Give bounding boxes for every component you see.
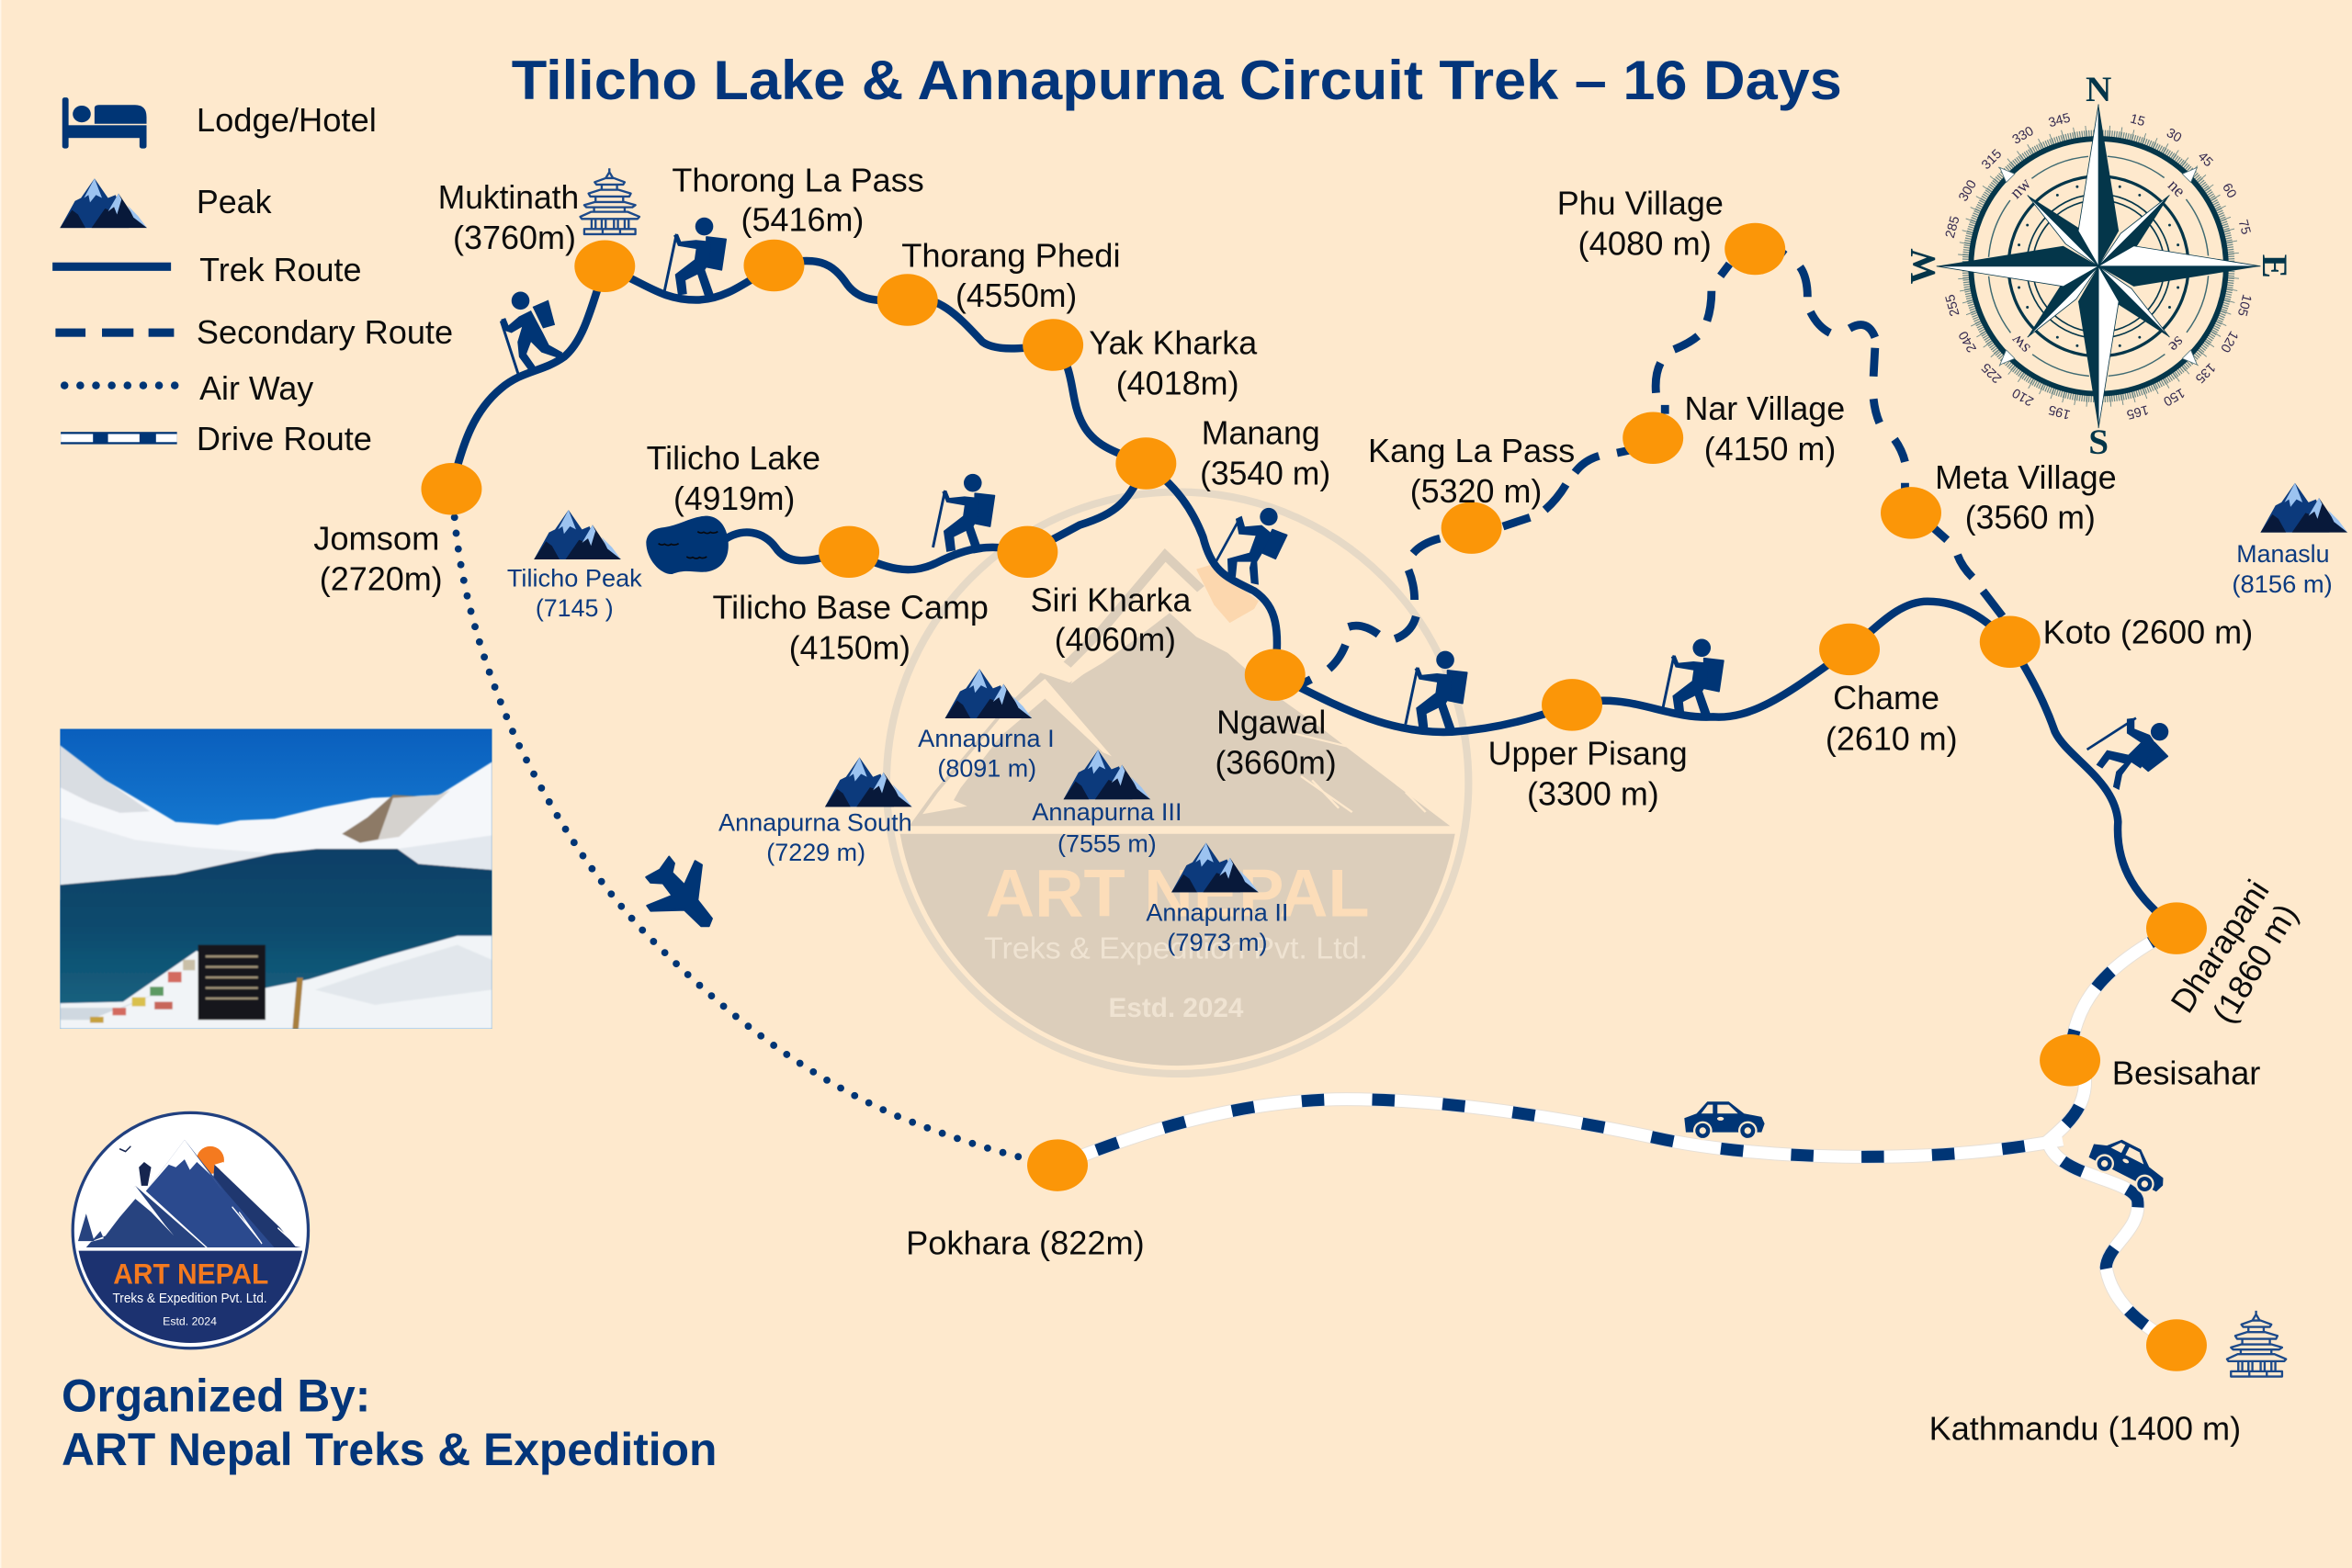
peak label: Tilicho Peak: (7145 )	[536, 594, 614, 622]
legend label: peak: Peak	[197, 183, 272, 220]
ART Nepal logo	[73, 1112, 309, 1348]
legend label: secondary route: Secondary Route	[197, 313, 453, 351]
drive route sample	[61, 432, 177, 445]
stop label: Thorong La Pass: (5416m)	[741, 200, 864, 238]
icon: peak Annapurna I	[945, 669, 1032, 718]
stop label: Siri Kharka: (4060m)	[1055, 621, 1176, 659]
stop label: Kathmandu: Kathmandu (1400 m)	[1929, 1409, 2241, 1447]
compass rose: N	[2086, 70, 2111, 109]
stop label: Tilicho Base Camp: (4150m)	[789, 629, 910, 667]
peak label: Annapurna I: (8091 m)	[937, 755, 1036, 783]
stop label: Kang La Pass: Kang La Pass	[1368, 432, 1575, 469]
compass rose	[1903, 70, 2294, 462]
stop label: Tilicho Lake: Tilicho Lake	[647, 439, 820, 477]
peak label: Annapurna III	[1032, 798, 1182, 857]
stop label: Tilicho Lake: (4919m)	[673, 479, 795, 517]
peak label: Annapurna III: (7555 m)	[1057, 829, 1157, 857]
peak label: Annapurna II: (7973 m)	[1167, 929, 1268, 956]
stop label: Jomsom	[313, 519, 443, 597]
compass rose: 210	[2010, 385, 2036, 409]
stop label: Ngawal: Ngawal	[1216, 703, 1326, 740]
stop label: Jomsom: (2720m)	[320, 559, 443, 597]
stop label: Manang: Manang	[1202, 413, 1320, 451]
stop label: Phu Village	[1557, 184, 1724, 263]
stop label: Nar Village	[1684, 389, 1845, 468]
stop label: Pokhara: Pokhara (822m)	[906, 1224, 1145, 1262]
compass rose: 75	[2235, 219, 2253, 236]
stop label: Muktinath: (3760m)	[453, 219, 576, 256]
peak label: Annapurna I	[918, 725, 1055, 783]
stop label: Phu Village: (4080 m)	[1578, 225, 1712, 263]
legend label: drive route: Drive Route	[197, 420, 372, 457]
icon: peak Annapurna III	[1064, 750, 1150, 799]
stop label: Koto: Koto (2600 m)	[2043, 613, 2253, 650]
stop label: Ngawal	[1215, 703, 1337, 781]
stop label: Thorong La Pass: Thorong La Pass	[672, 161, 924, 198]
organizer credit: ART Nepal Treks & Expedition	[62, 1424, 717, 1475]
stop label: Dharapani: (1860 m)	[2204, 897, 2305, 1030]
compass rose: W	[1903, 248, 1942, 284]
title: Tilicho Lake & Annapurna Circuit Trek – 16 Days	[512, 49, 1842, 111]
stop label: Kang La Pass: (5320 m)	[1410, 472, 1542, 510]
peak label: Manaslu: (8156 m)	[2232, 570, 2333, 598]
compass rose: 240	[1956, 328, 1980, 355]
logo brand name: ART NEPAL	[113, 1258, 268, 1291]
watermark brand name: ART NEPAL	[986, 855, 1370, 931]
compass rose: sw	[2007, 330, 2034, 357]
stop label: Manang	[1200, 413, 1330, 491]
stop label: Upper Pisang: (3300 m)	[1527, 775, 1659, 813]
peak label: Annapurna South: Annapurna South	[718, 808, 912, 836]
peak label: Manaslu: Manaslu	[2236, 540, 2330, 568]
stop label: Chame	[1826, 679, 1958, 757]
stop label: Thorang Phedi: Thorang Phedi	[901, 237, 1121, 275]
icon: temple at Muktinath	[581, 168, 639, 234]
icon: climber after Koto	[2087, 718, 2168, 790]
icon: peak Tilicho	[534, 510, 621, 559]
icon: hiker near Siri Kharka	[933, 474, 994, 553]
air way sample	[61, 381, 178, 389]
icon: car near Besisahar	[2084, 1129, 2173, 1201]
stop label: Thorang Phedi	[901, 237, 1121, 314]
stop label: Dharapani: Dharapani	[2163, 873, 2277, 1020]
drive route	[1057, 929, 2177, 1345]
stop label: Phu Village: Phu Village	[1557, 184, 1724, 221]
peak label: Manaslu	[2232, 540, 2333, 598]
peak label: Tilicho Peak: Tilicho Peak	[507, 564, 642, 592]
peak label: Tilicho Peak	[507, 564, 642, 622]
compass rose: 30	[2164, 126, 2184, 146]
compass rose: 165	[2125, 401, 2150, 422]
icon: Tilicho Lake	[646, 516, 729, 574]
peak label: Annapurna III: Annapurna III	[1032, 798, 1182, 826]
compass rose: 330	[2010, 124, 2036, 148]
stop label: Upper Pisang	[1488, 735, 1688, 813]
stop label: Yak Kharka: Yak Kharka	[1089, 323, 1257, 361]
stop label: Tilicho Lake	[647, 439, 820, 517]
icon: hiker above Jomsom	[501, 292, 562, 377]
stop label: Muktinath: Muktinath	[438, 178, 579, 216]
stop label: Tilicho Base Camp	[713, 588, 989, 667]
compass rose: 225	[1979, 360, 2005, 386]
compass rose: 195	[2047, 401, 2072, 422]
compass rose: 285	[1943, 215, 1962, 240]
legend label: lodge: Lodge/Hotel	[197, 101, 377, 139]
compass rose: 135	[2192, 360, 2218, 386]
trek route sample	[52, 263, 171, 271]
compass rose: 15	[2129, 112, 2146, 130]
compass rose: nw	[2007, 174, 2035, 203]
stop label: Jomsom: Jomsom	[313, 519, 439, 557]
organizer credit: Organized By:	[62, 1370, 370, 1421]
compass rose: 300	[1956, 177, 1980, 204]
secondary route sample	[55, 329, 174, 337]
stop label: Meta Village: Meta Village	[1935, 458, 2117, 496]
logo mountains	[78, 1140, 300, 1247]
stop label: Thorong La Pass	[672, 161, 924, 238]
stop label: Yak Kharka	[1089, 323, 1257, 401]
compass rose: ne	[2164, 175, 2188, 201]
stop label: Chame: (2610 m)	[1826, 719, 1958, 757]
compass rose: E	[2255, 254, 2294, 278]
legend label: air way: Air Way	[199, 369, 313, 407]
logo subtitle: Treks & Expedition Pvt. Ltd.	[112, 1292, 267, 1306]
icon: airplane	[646, 857, 712, 926]
stop label: Manang: (3540 m)	[1200, 454, 1330, 491]
stop label: Chame: Chame	[1833, 679, 1939, 716]
legend	[52, 97, 453, 457]
stop label: Besisahar: Besisahar	[2112, 1054, 2260, 1091]
stop label: Meta Village: (3560 m)	[1965, 499, 2096, 536]
compass rose: 315	[1979, 147, 2005, 173]
compass rose: 60	[2219, 181, 2239, 201]
icon: peak Annapurna South	[825, 757, 912, 807]
stop label: Nar Village: (4150 m)	[1704, 430, 1836, 468]
icon: hiker after Upper Pisang	[1662, 639, 1724, 718]
photo: Tilicho Lake	[60, 728, 492, 1029]
compass rose: 45	[2195, 150, 2215, 170]
compass rose: se	[2165, 333, 2188, 355]
logo established: Estd. 2024	[163, 1314, 217, 1327]
icon: temple at Kathmandu	[2227, 1311, 2286, 1377]
route stop markers	[421, 223, 2207, 1371]
compass rose: 105	[2234, 293, 2254, 318]
stop label: Siri Kharka	[1031, 581, 1191, 659]
stop label: Thorang Phedi: (4550m)	[956, 276, 1077, 314]
logo sun	[197, 1146, 224, 1174]
stop label: Kang La Pass	[1368, 432, 1575, 510]
organizer credit	[62, 1370, 717, 1475]
legend label: trek route: Trek Route	[199, 251, 361, 288]
stop label: Ngawal: (3660m)	[1215, 743, 1337, 781]
icon: peak Annapurna II	[1171, 843, 1259, 892]
stop label: Upper Pisang: Upper Pisang	[1488, 735, 1688, 773]
peak label: Annapurna South: (7229 m)	[766, 839, 865, 866]
icon: bed	[62, 97, 147, 149]
icon: car on Pokhara road	[1684, 1101, 1765, 1140]
compass rose: 255	[1943, 293, 1962, 318]
peak label: Annapurna I: Annapurna I	[918, 725, 1055, 752]
peak label: Annapurna II	[1146, 898, 1288, 956]
watermark logo	[887, 492, 1468, 1074]
compass rose: S	[2088, 423, 2109, 462]
icon: hiker after Ngawal	[1406, 651, 1467, 730]
icon: hiker near Thorong La	[664, 218, 726, 297]
trek route	[455, 261, 2177, 929]
peak label: Annapurna II: Annapurna II	[1146, 898, 1288, 926]
secondary route	[1299, 251, 2003, 685]
icon: peak Manaslu	[2260, 483, 2347, 533]
stop label: Siri Kharka: Siri Kharka	[1031, 581, 1191, 618]
compass rose: 345	[2047, 111, 2072, 130]
icon: hiker below Manang	[1215, 508, 1287, 585]
stop label: Muktinath	[438, 178, 579, 256]
compass rose: 120	[2217, 328, 2241, 355]
stop label: Yak Kharka: (4018m)	[1116, 364, 1239, 401]
stop label: Meta Village	[1935, 458, 2117, 536]
air way dotted route	[455, 517, 1035, 1161]
stop label: Tilicho Base Camp: Tilicho Base Camp	[713, 588, 989, 626]
compass rose: 150	[2161, 385, 2187, 409]
icon: peak	[60, 178, 147, 228]
watermark established: Estd. 2024	[1109, 993, 1244, 1023]
stop label: Nar Village: Nar Village	[1684, 389, 1845, 427]
peak label: Annapurna South	[718, 808, 912, 866]
watermark subtitle: Treks & Expedition Pvt. Ltd.	[984, 931, 1368, 965]
